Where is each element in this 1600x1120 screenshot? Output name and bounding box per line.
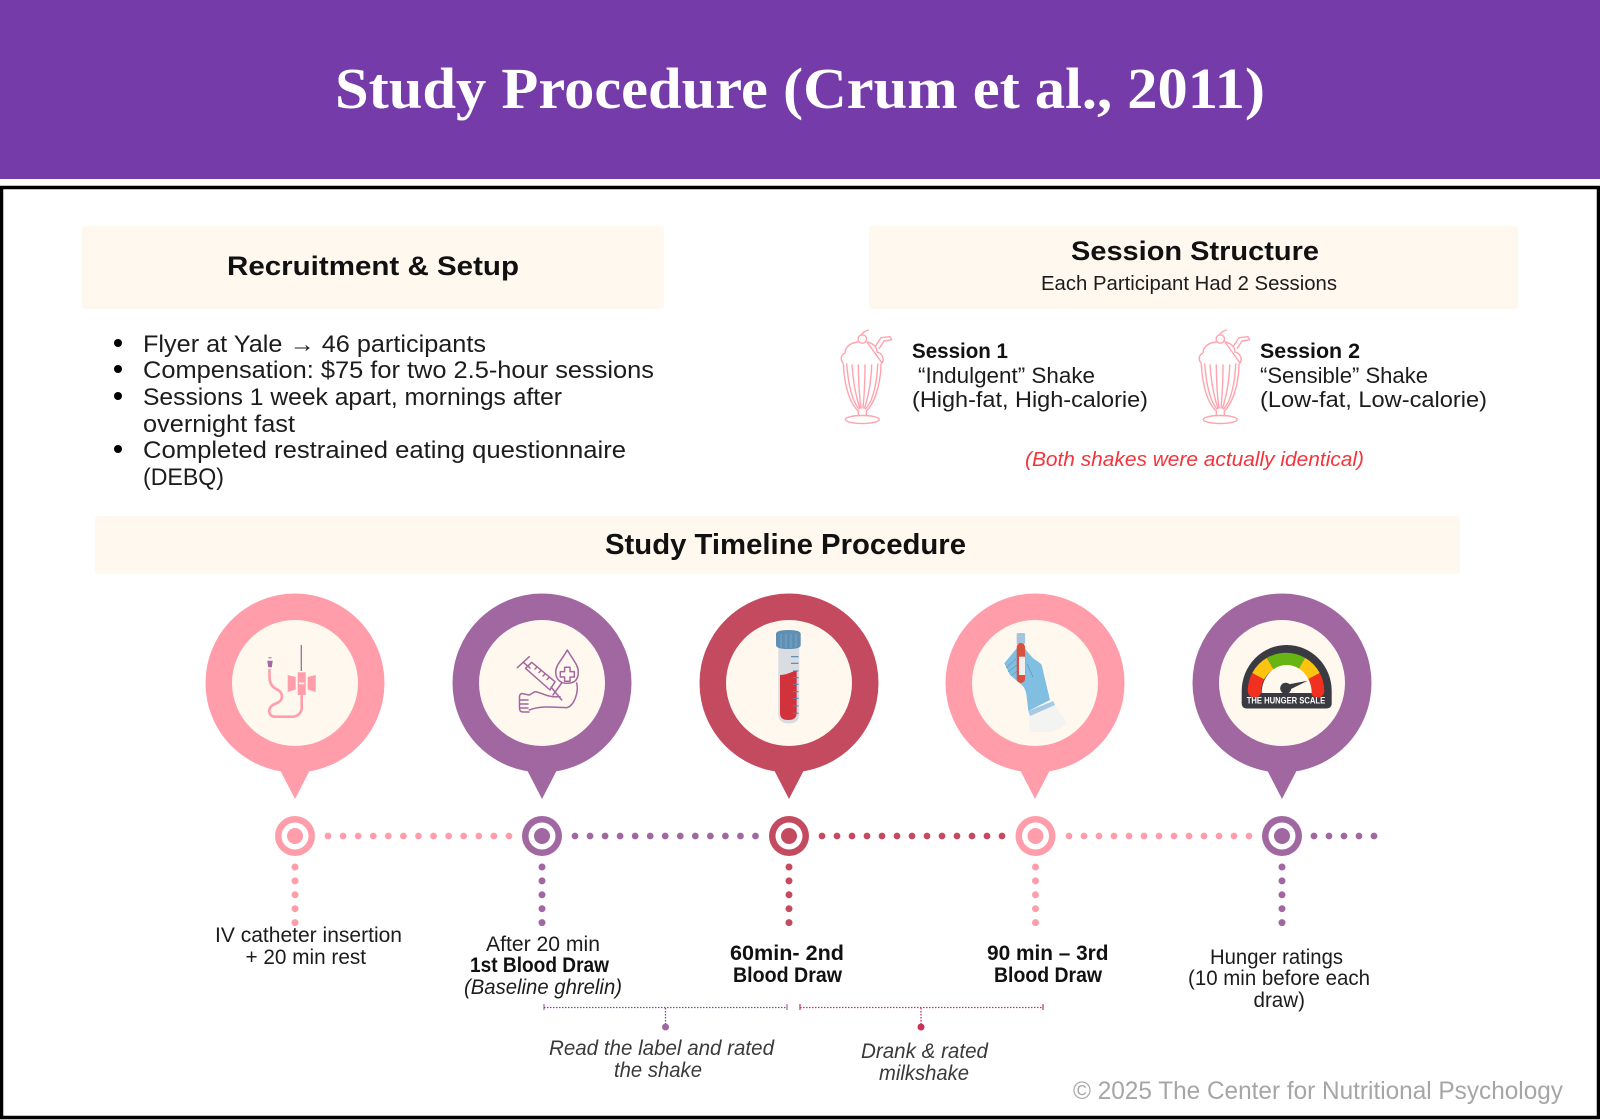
label: third blood draw: Blood Draw bbox=[994, 964, 1103, 987]
heading: study timeline bbox=[95, 516, 1460, 574]
label: IV catheter: IV catheter insertion bbox=[215, 924, 402, 947]
timeline track with nodes bbox=[275, 816, 1374, 923]
bullet list: overnight fast bbox=[143, 411, 295, 438]
icon: milkshake 2 bbox=[1199, 330, 1250, 424]
session 2 text: (Low-fat, Low-calorie) bbox=[1260, 387, 1487, 412]
label: first blood draw: After 20 min bbox=[486, 933, 600, 956]
session 1 text: “Indulgent” Shake bbox=[918, 363, 1095, 388]
label: third blood draw: 90 min – 3rd bbox=[987, 942, 1108, 965]
heading: study timeline: Study Timeline Procedure bbox=[605, 529, 966, 561]
session 2 text bbox=[1260, 340, 1487, 412]
copyright: © 2025 The Center for Nutritional Psychology bbox=[1073, 1077, 1563, 1105]
step 5 pin: hunger scale bbox=[1192, 594, 1372, 799]
session 1 text bbox=[912, 340, 1148, 412]
heading: recruitment and setup bbox=[82, 226, 664, 309]
session 2 text: “Sensible” Shake bbox=[1260, 363, 1428, 388]
step 2 pin: syringe and arm bbox=[452, 594, 632, 799]
heading: recruitment and setup: Recruitment & Setup bbox=[227, 251, 519, 281]
label: IV catheter bbox=[215, 924, 402, 969]
panel: session structure bbox=[841, 226, 1518, 471]
callout: identical shakes: (Both shakes were actually identical) bbox=[1025, 448, 1364, 471]
label: first blood draw: (Baseline ghrelin) bbox=[464, 976, 622, 999]
bullet list: (DEBQ) bbox=[143, 464, 224, 491]
bracket: drank and rated: milkshake bbox=[879, 1062, 969, 1085]
title banner: Study Procedure (Crum et al., 2011) bbox=[335, 56, 1265, 121]
label: second blood draw bbox=[730, 942, 844, 987]
bullet list: Flyer at Yale → 46 participants bbox=[143, 331, 486, 358]
step 1 pin: IV catheter bbox=[206, 594, 384, 799]
label: second blood draw: Blood Draw bbox=[733, 964, 843, 987]
icon: test tube bbox=[776, 630, 801, 724]
bracket: read the label bbox=[544, 1004, 787, 1082]
label: hunger ratings: Hunger ratings bbox=[1210, 946, 1343, 969]
heading: session structure bbox=[869, 226, 1518, 309]
heading: session structure: Each Participant Had 2 Sessions bbox=[1041, 273, 1337, 295]
icon: hunger scale gauge: THE HUNGER SCALE bbox=[1247, 696, 1325, 706]
label: hunger ratings: (10 min before each bbox=[1188, 967, 1370, 990]
panel: recruitment and setup bbox=[82, 226, 664, 491]
bracket: read the label: the shake bbox=[614, 1059, 702, 1082]
bullet list: Compensation: $75 for two 2.5-hour sessions bbox=[143, 357, 654, 384]
icon: milkshake 1 bbox=[841, 330, 892, 424]
label: second blood draw: 60min- 2nd bbox=[730, 942, 844, 965]
step 3 pin: blood test tube bbox=[700, 594, 878, 799]
label: first blood draw: 1st Blood Draw bbox=[470, 954, 610, 977]
bullet list bbox=[114, 331, 654, 491]
title banner bbox=[0, 0, 1600, 179]
session 2 text: Session 2 bbox=[1260, 340, 1360, 363]
heading: session structure: Session Structure bbox=[1071, 236, 1319, 266]
bracket: drank and rated bbox=[800, 1004, 1043, 1085]
panel: study timeline procedure bbox=[95, 516, 1460, 1085]
bracket: read the label: Read the label and rated bbox=[549, 1037, 775, 1060]
icon: IV catheter bbox=[267, 645, 316, 717]
session 1 text: (High-fat, High-calorie) bbox=[912, 387, 1148, 412]
session 1 text: Session 1 bbox=[912, 340, 1008, 363]
label: first blood draw bbox=[464, 933, 622, 999]
step 4 pin: gloved hand with sample bbox=[946, 594, 1124, 799]
icon: gloved hand bbox=[1004, 633, 1067, 732]
icon: hunger scale gauge bbox=[1242, 645, 1332, 708]
label: third blood draw bbox=[987, 942, 1108, 987]
bracket: drank and rated: Drank & rated bbox=[861, 1040, 989, 1063]
bullet list: Completed restrained eating questionnaire bbox=[143, 437, 626, 464]
label: IV catheter: + 20 min rest bbox=[246, 946, 366, 969]
bullet list: Sessions 1 week apart, mornings after bbox=[143, 384, 562, 411]
label: hunger ratings bbox=[1188, 946, 1370, 1012]
icon: syringe and arm bbox=[517, 650, 578, 712]
label: hunger ratings: draw) bbox=[1254, 989, 1305, 1012]
